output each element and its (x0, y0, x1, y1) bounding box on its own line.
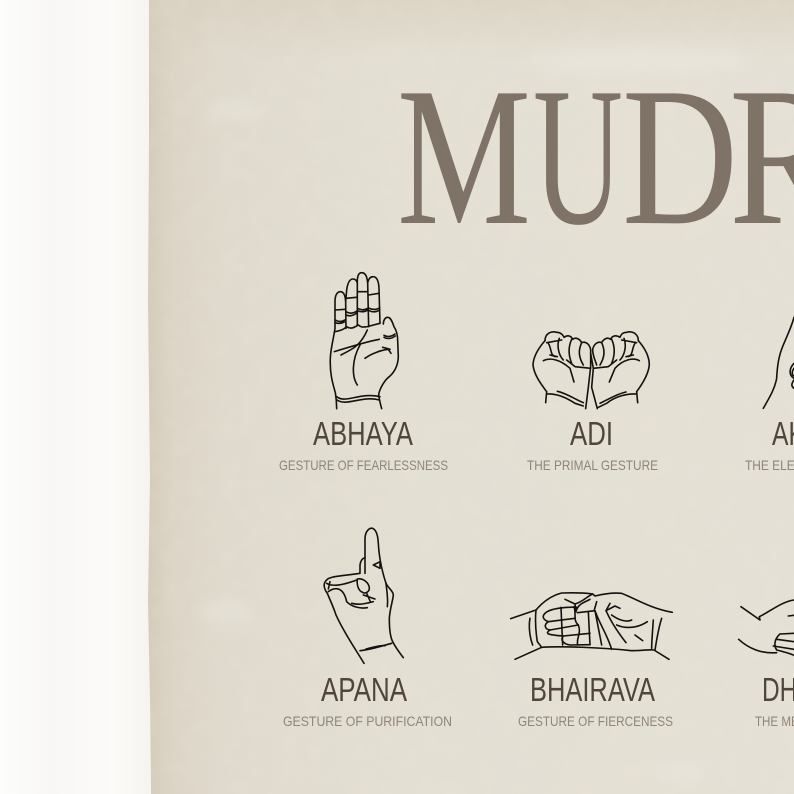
icon: index finger raised with thumb joined to fingers (324, 528, 403, 663)
name: APANA (321, 671, 407, 708)
panel: Akasha (745, 317, 794, 473)
title: M (397, 47, 531, 266)
background wall (0, 0, 150, 794)
description: GESTURE OF PURIFICATION (283, 713, 452, 729)
title (397, 47, 794, 266)
description: GESTURE OF FIERCENESS (518, 713, 673, 729)
description: THE PRIMAL GESTURE (527, 457, 658, 473)
title: D (622, 47, 738, 266)
panel: Abhaya (279, 273, 448, 473)
name: BHAIRAVA (530, 671, 655, 708)
description: GESTURE OF FEARLESSNESS (279, 457, 448, 473)
panel: Bhairava (511, 593, 673, 729)
name: ABHAYA (313, 415, 413, 452)
panel: Adi (527, 332, 658, 473)
panel: Apana (283, 528, 452, 729)
icon: partial resting hands (739, 600, 794, 655)
icon: two cupped hands (533, 332, 649, 409)
icon: one hand resting in the other (511, 593, 672, 659)
icon: raised open hand (330, 273, 398, 409)
title: U (533, 47, 623, 266)
panel: Dhyana (739, 600, 794, 729)
icon: partial hand (763, 317, 794, 408)
name: ADI (570, 415, 613, 452)
